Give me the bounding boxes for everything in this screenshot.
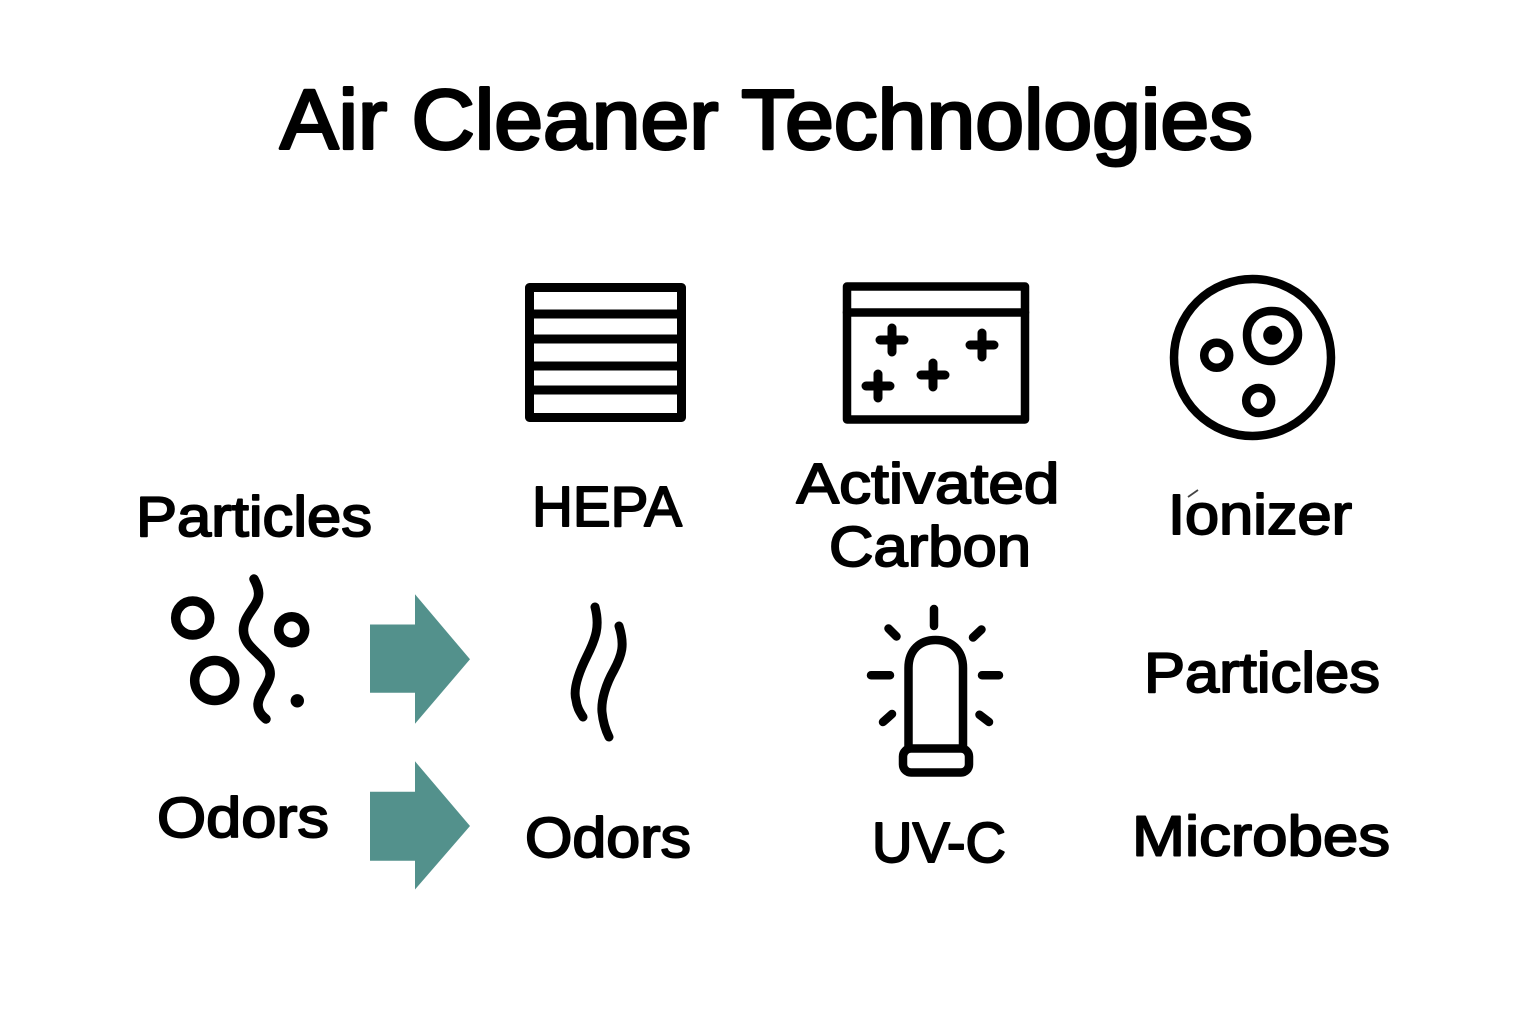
label: Activated Carbon: Carbon [829,515,1031,579]
icon: HEPA filter [530,288,682,418]
icon: particles [176,579,305,719]
label: Microbes: Microbes [1132,804,1390,868]
label: HEPA: HEPA [532,475,682,539]
label: Particles (left): Particles [136,485,372,549]
icon: UV-C lamp [871,609,999,772]
title: Air Cleaner Technologies [280,72,1253,166]
label: Ionizer: Ionizer [1168,483,1352,547]
label: Activated Carbon: Activated [796,452,1060,516]
icon: ionizer [1174,279,1331,436]
label: Particles (right): Particles [1144,641,1380,705]
arrow: particles [370,594,470,724]
icon: activated carbon filter [847,286,1025,420]
arrow: odors [370,761,470,890]
icon: odor waves [575,607,622,737]
label: Activated Carbon [796,452,1060,579]
label: Odors (left): Odors [157,786,329,850]
label: Odors (center): Odors [525,806,691,870]
label: UV-C: UV-C [872,811,1006,875]
